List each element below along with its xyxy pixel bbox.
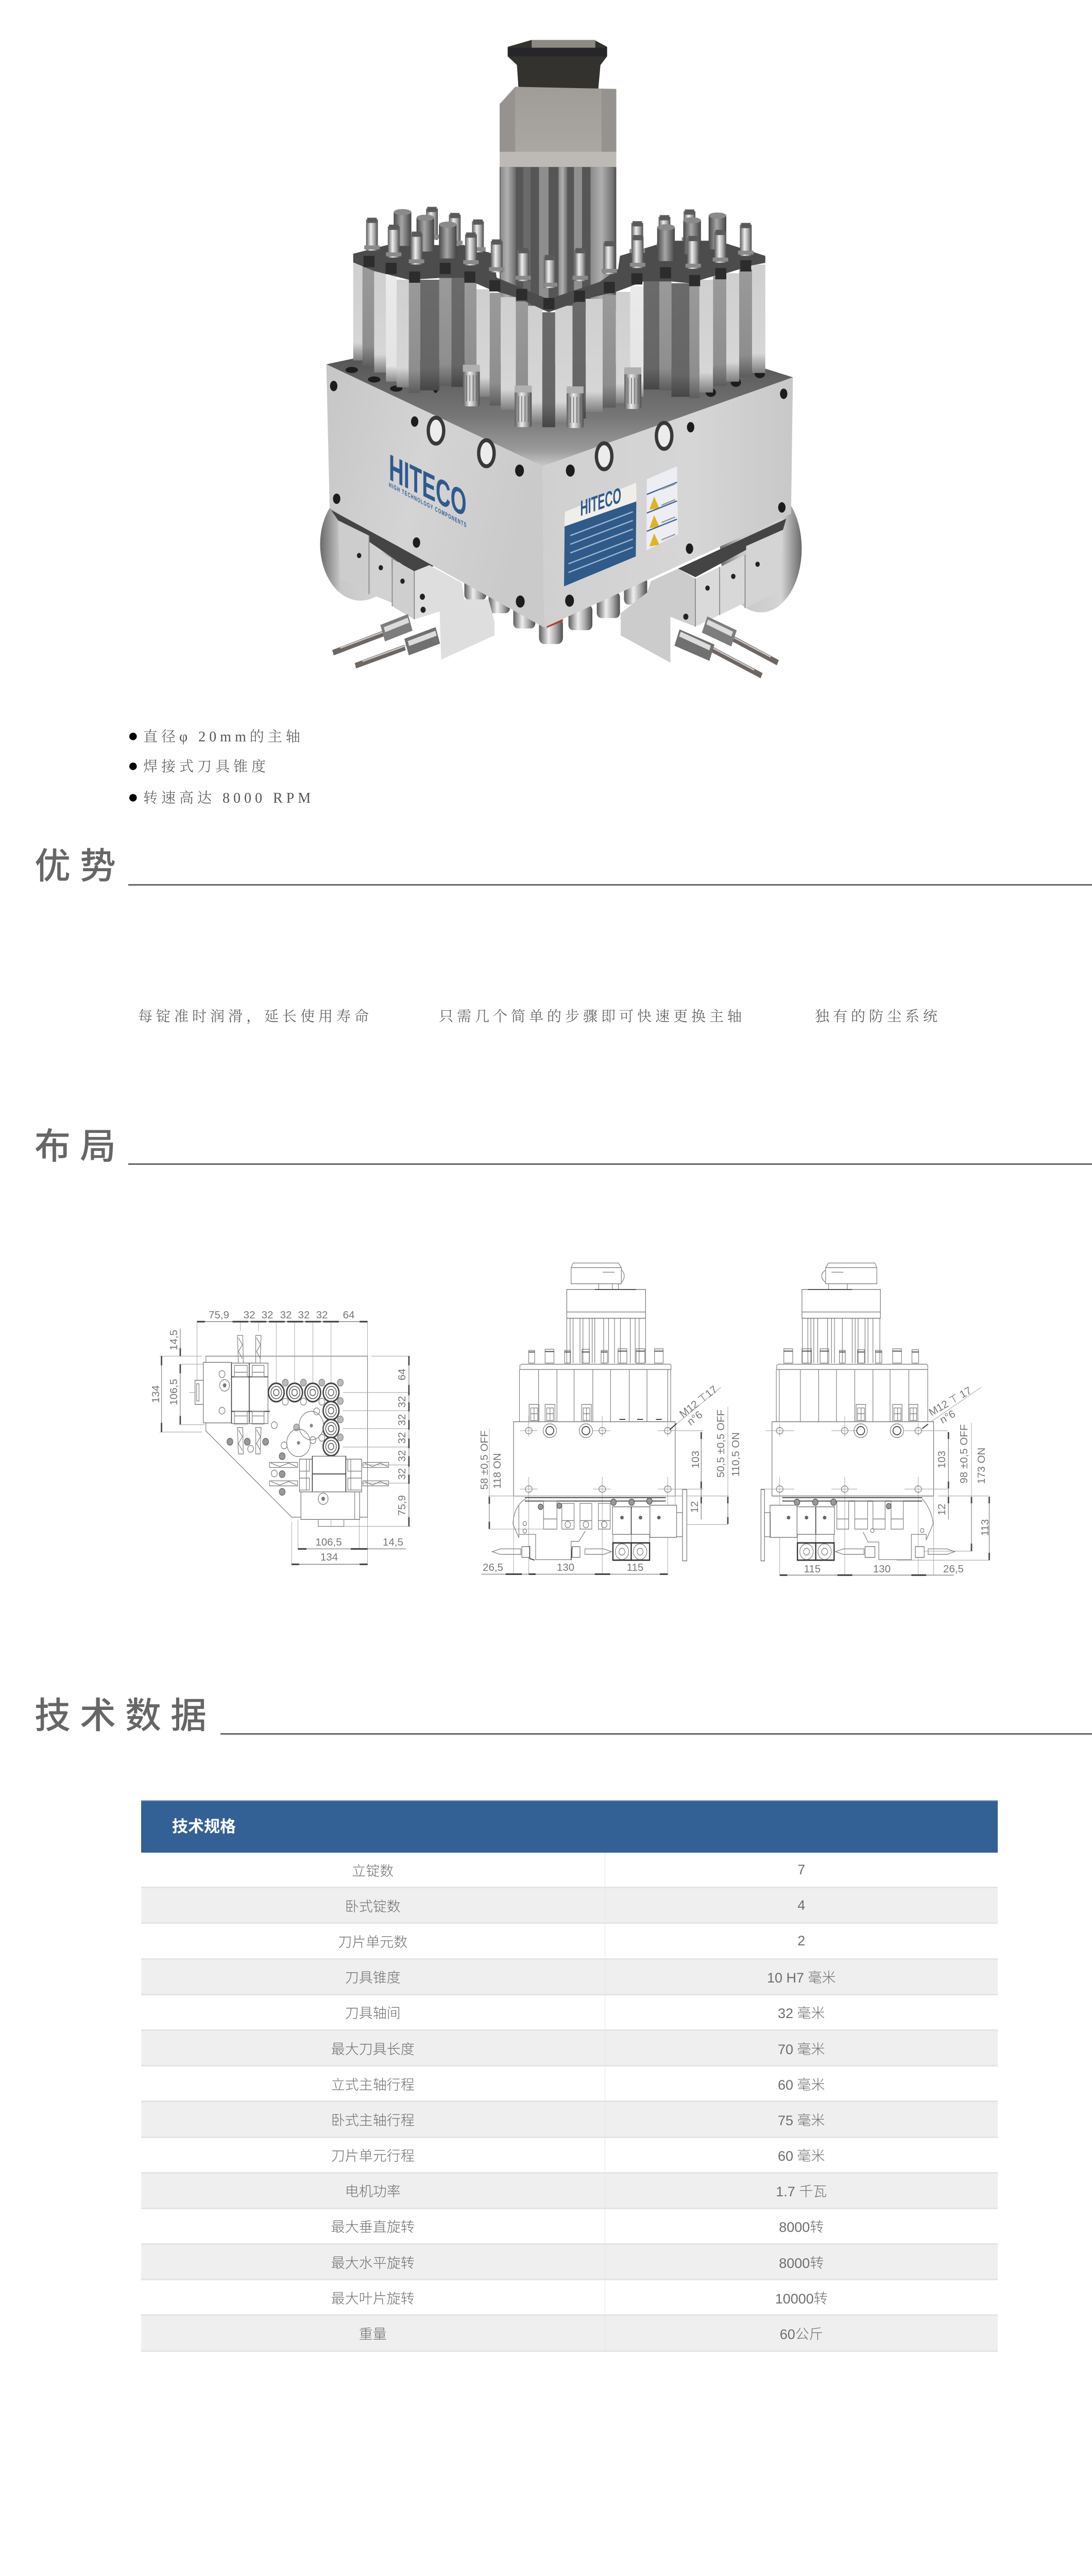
drawing: top view with dimensions: 14,5 [383,1536,403,1548]
drawing: rear elevation with dimensions: 130 [873,1563,891,1575]
drawing: rear elevation with dimensions [761,1263,991,1575]
table rows: 10 H7 毫米 [767,1970,836,1986]
caption: dust protection: 独有的防尘系统 [815,1009,941,1025]
table rows: 最大刀具长度 [331,2042,415,2057]
right aggregate [621,485,801,676]
table rows: 2 [797,1933,805,1948]
warning labels [646,466,678,550]
caption: quick change: 只需几个简单的步骤即可快速更换主轴 [439,1009,745,1025]
table rows: 75 毫米 [778,2113,825,2128]
heading: layout: 布局 [35,1126,125,1166]
table rows: 电机功率 [345,2184,401,2199]
motor housing [500,87,616,167]
feature: speed: 转速高达 8000 RPM [143,790,314,806]
drawing: top view with dimensions: 64 [343,1309,354,1321]
product photo: HITECO boring head [320,40,801,676]
table rows: 最大垂直旋转 [331,2219,415,2235]
drawing: front elevation with dimensions: 130 [557,1562,574,1573]
table rows: 4 [797,1897,805,1913]
block left face [327,364,544,628]
base holes [346,367,765,397]
table rows: 32 毫米 [778,2006,825,2021]
table rows: 重量 [359,2327,387,2342]
table rows: 刀片单元行程 [331,2148,415,2164]
table rows: 60 毫米 [778,2077,825,2093]
drawing: top view with dimensions: 134 [320,1551,338,1563]
table rows: 7 [797,1862,805,1877]
spindle bodies [353,262,765,427]
drawing: front elevation with dimensions: M12 ⊤17 [677,1383,720,1420]
drawing: top view with dimensions: 32 [280,1309,292,1321]
drawing: front elevation with dimensions: 50,5 ±0,5 OFF [715,1410,727,1478]
caption: lubrication: 每锭准时润滑，延长使用寿命 [138,1009,372,1025]
drawing: top view with dimensions: 32 [396,1396,408,1408]
feature: spindle diameter: ● [128,725,139,746]
drawing: top view with dimensions: 32 [396,1432,408,1444]
knurled screws [463,365,641,428]
motor columns [500,167,616,310]
drawing: top view with dimensions: 32 [262,1309,273,1321]
feature: weldable taper: 焊接式刀具锥度 [143,759,269,775]
drawing: rear elevation with dimensions: 113 [979,1519,991,1536]
table rows: 最大叶片旋转 [331,2291,415,2307]
drawing: top view with dimensions: 32 [316,1309,328,1321]
drawing: top view with dimensions: 32 [396,1414,408,1426]
drawing: front elevation with dimensions: 12 [689,1501,701,1513]
table rows: 60公斤 [780,2327,823,2342]
drawing: front elevation with dimensions [479,1263,742,1574]
drawing: rear elevation with dimensions: n°6 [938,1408,958,1426]
lifting rings [428,418,672,469]
block top face [327,358,793,466]
table rows: 10000转 [775,2291,828,2307]
table rows [141,1853,998,2352]
drawing: top view with dimensions [150,1309,410,1566]
machine data plate: HITECO [580,483,621,521]
feature: speed: ● [128,787,139,807]
drawing: rear elevation with dimensions: 103 [936,1451,948,1468]
feature: weldable taper: ● [128,755,139,776]
drawing: rear elevation with dimensions: 173 ON [976,1448,987,1484]
drawing: front elevation with dimensions: n°6 [685,1409,705,1428]
heading: advantages: 优势 [35,846,125,886]
drawing: rear elevation with dimensions: 98 ±0,5 OFF [958,1425,970,1483]
lower spindles [464,577,647,644]
drawing: top view with dimensions: 64 [396,1369,408,1380]
drawing: front elevation with dimensions: 110,5 ON [730,1432,742,1477]
drawing: top view with dimensions: 32 [244,1309,255,1321]
drawing: front elevation with dimensions: 58 ±0,5 OFF [479,1431,490,1489]
drawing: front elevation with dimensions: 26,5 [483,1562,503,1573]
drawing: top view with dimensions: 106,5 [168,1379,180,1405]
feature list [128,725,314,807]
drawing: rear elevation with dimensions: 26,5 [943,1563,964,1575]
drawing: front elevation with dimensions: 103 [690,1451,702,1468]
drawing: top view with dimensions: 32 [396,1450,408,1462]
block holes [330,381,788,607]
table rows: 8000转 [779,2219,824,2235]
table rows: 刀片单元数 [338,1935,407,1950]
heading: technical data: 技术数据 [35,1696,216,1736]
table rows: 立式主轴行程 [331,2077,415,2093]
left aggregate [320,488,494,666]
drawing: top view with dimensions: 14,5 [168,1330,180,1350]
table rows: 刀具锥度 [345,1970,401,1986]
specification table [141,1800,998,2352]
drawing: front elevation with dimensions: 118 ON [491,1453,503,1489]
drawing: rear elevation with dimensions: 12 [936,1504,948,1515]
table header [141,1800,998,1853]
feature: weldable taper [128,755,269,776]
table rows: 70 毫米 [778,2042,825,2057]
spindle top plates [353,241,765,312]
heading rule: layout [128,1163,1092,1165]
logo on left face: HITECO [389,446,467,525]
drawing: top view with dimensions: 32 [396,1468,408,1480]
drawing: rear elevation with dimensions: 115 [804,1563,821,1575]
table rows: 卧式主轴行程 [331,2113,415,2128]
feature: spindle diameter: 直径φ 20mm的主轴 [143,729,304,745]
drawing: top view with dimensions: 32 [298,1309,310,1321]
drawing: top view with dimensions: 75,9 [396,1495,408,1516]
drawing: rear elevation with dimensions: M12 ⊤ 17 [927,1384,974,1418]
heading rule: technical data [220,1733,1092,1735]
block right face [543,377,793,628]
table rows: 最大水平旋转 [331,2256,415,2271]
drawing: top view with dimensions: 106,5 [315,1536,342,1548]
table header: 技术规格 [172,1818,236,1836]
heading rule: advantages [128,884,1092,886]
table rows: 8000转 [779,2256,824,2271]
screw heads [364,256,752,309]
table rows: 卧式锭数 [345,1899,401,1914]
table rows: 立锭数 [352,1863,394,1879]
machine data plate [564,482,637,586]
drawing: top view with dimensions: 134 [150,1385,162,1403]
table rows: 刀具轴间 [345,2006,401,2021]
logo on left face: HIGH TECHNOLOGY COMPONENTS [389,481,466,529]
table rows: 60 毫米 [778,2148,825,2164]
table rows: 1.7 千瓦 [776,2184,827,2199]
drawing: top view with dimensions: 75,9 [209,1309,229,1321]
spindle pegs [364,207,754,288]
drawing: front elevation with dimensions: 115 [627,1562,643,1573]
motor cover [508,40,607,93]
